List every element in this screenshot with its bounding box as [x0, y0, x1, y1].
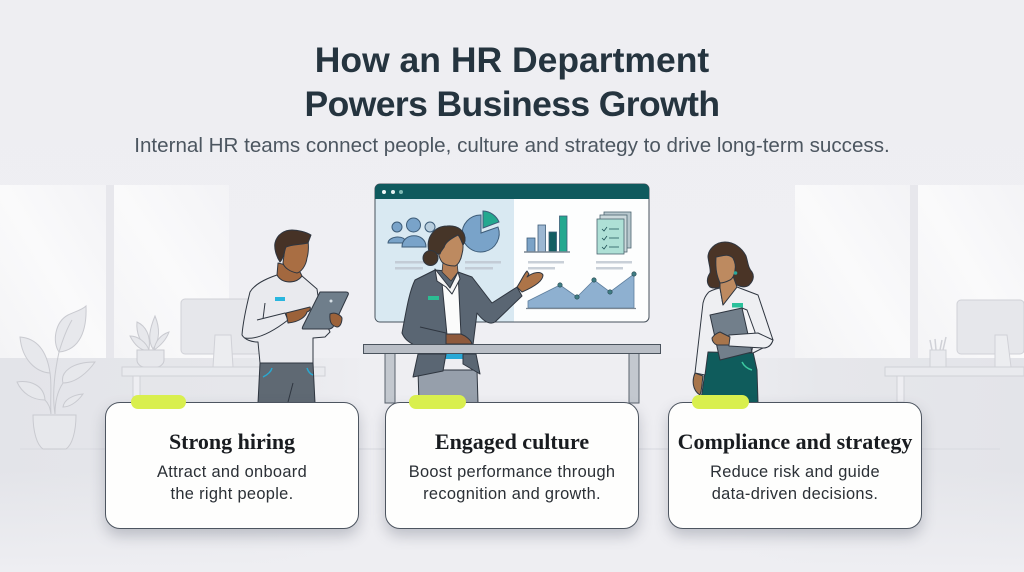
area line chart — [526, 272, 636, 308]
left desk with monitor — [122, 299, 325, 402]
table legs — [385, 353, 639, 403]
tablet — [302, 292, 348, 329]
blouse — [695, 287, 773, 375]
hand — [712, 332, 730, 345]
card text: recognition and growth. — [423, 485, 601, 503]
face — [716, 255, 735, 283]
blue belt and jacket hem below table — [413, 354, 480, 377]
card text: Attract and onboard — [157, 463, 307, 481]
skirt — [418, 370, 478, 403]
card text: Reduce risk and guide — [710, 463, 880, 481]
hand resting at table — [446, 334, 472, 344]
card: engaged culture — [385, 402, 639, 529]
card heading: Engaged culture — [435, 429, 589, 454]
card heading: Strong hiring — [169, 429, 295, 454]
accent pill: hiring — [131, 395, 186, 409]
presentation screen — [375, 184, 649, 322]
title — [305, 40, 719, 124]
face — [438, 235, 463, 266]
card heading: Compliance and strategy — [678, 429, 912, 454]
hair — [428, 226, 465, 254]
accent pill: culture — [409, 395, 466, 409]
hands — [286, 307, 310, 323]
collar — [435, 269, 460, 294]
left office windows — [0, 185, 229, 358]
card: strong hiring — [105, 402, 359, 529]
trousers — [700, 350, 758, 403]
torso and arm — [242, 275, 330, 363]
card text: data-driven decisions. — [712, 485, 878, 503]
card: compliance and strategy — [668, 402, 922, 529]
blazer body and arm — [402, 270, 522, 345]
right desk with monitor and pencil cup — [885, 300, 1024, 402]
screen placeholder lines, right — [528, 261, 632, 270]
card text: the right people. — [170, 485, 294, 503]
card text — [409, 463, 615, 503]
large potted plant — [17, 306, 95, 449]
hair — [707, 242, 753, 288]
icon: people group — [388, 218, 435, 247]
card text — [710, 463, 880, 503]
neck and chest — [720, 276, 737, 305]
badge — [275, 297, 285, 301]
person: woman with folder — [693, 242, 773, 403]
hair — [275, 230, 311, 262]
hand — [517, 271, 543, 292]
neck — [442, 262, 458, 281]
screen placeholder lines, left — [395, 261, 501, 270]
white shirt — [442, 272, 461, 335]
forearm — [729, 333, 773, 348]
neck — [277, 263, 302, 282]
icon: pie chart — [462, 211, 499, 252]
badge — [732, 303, 743, 308]
bar chart icon — [524, 216, 570, 252]
name badge — [428, 296, 439, 300]
card text — [157, 463, 307, 503]
person: man with tablet — [242, 230, 348, 403]
right office windows — [795, 185, 1024, 358]
small plant on desk — [130, 316, 169, 367]
icon: checklist documents — [597, 212, 631, 254]
table top — [364, 344, 660, 354]
title: How an HR Department — [315, 40, 709, 80]
left hand — [693, 373, 703, 395]
presenter: woman in blazer — [402, 226, 543, 403]
title: Powers Business Growth — [305, 84, 719, 124]
subtitle: Internal HR teams connect people, culture and strategy to drive long-term success. — [134, 134, 890, 156]
card text: Boost performance through — [409, 463, 615, 481]
trousers — [258, 363, 315, 403]
folder — [742, 308, 755, 350]
accent pill: compliance — [692, 395, 749, 409]
face — [283, 241, 308, 273]
